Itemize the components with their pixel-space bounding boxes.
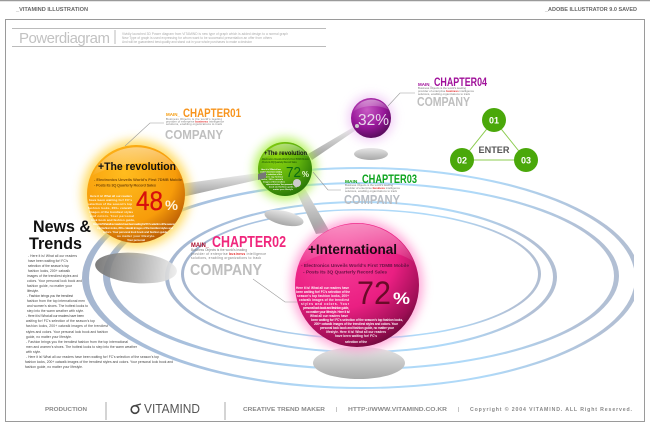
connector: green to purple (308, 125, 359, 160)
body text: lifestyle. Here it is! What all our readers (326, 330, 386, 334)
news text: selection of the season's top (28, 264, 69, 268)
callout: chapter 02: COMPANY (190, 262, 262, 279)
callout: chapter 01: MAIN_ (166, 112, 180, 117)
body text: season's top fashion (261, 176, 284, 178)
news text: images of the trendiest styles and (27, 274, 78, 278)
panel: chapter 01 sphere (82, 140, 190, 248)
connector: green to pink (293, 182, 330, 234)
heading: +The revolution (98, 161, 176, 173)
node 02: 02 (457, 156, 467, 166)
shadow: purple sphere (354, 148, 388, 160)
title description: Vividly launched 3D Power diagram from VITAMIND is new type of graph which is added design to a normal graph (122, 32, 288, 36)
callout: chapter 01 (125, 106, 241, 146)
body text: looks, 200+ catwalk (261, 178, 284, 181)
body text: styles and colors. Your (301, 302, 350, 306)
joint (355, 124, 359, 128)
body text: season's top fashion looks, 200+ (297, 294, 349, 298)
value: 48 (136, 186, 163, 216)
news heading: Trends (29, 234, 82, 253)
body text: Here it is! What all our readers have been waiting for! FC's selection of the season (93, 222, 175, 226)
logo: VITAMIND (144, 401, 200, 416)
callout: chapter 04 (388, 77, 487, 109)
news text: fashion looks, 200+ catwalk images of the trendiest (26, 324, 108, 328)
news text: guide, no matter your lifestyle. (26, 335, 72, 339)
callout: chapter 03: solutions, enabling organizations to track (345, 189, 398, 193)
bullets: - Electronics Unveils World's First 7DMB Mobile (261, 158, 310, 161)
body text: Your personal (127, 238, 145, 242)
body text: no matter your lifestyle. (117, 234, 155, 238)
body text: personal look book and fashion guide, (303, 306, 349, 310)
shadow: orange sphere (94, 249, 178, 287)
news text: - Here it is! What all our readers (28, 254, 77, 258)
bullets: - Posts its 3Q Quarterly Record Sales (261, 161, 298, 164)
callout: chapter 04: MAIN_ (418, 82, 432, 87)
panel: chapter 04 sphere (348, 95, 394, 141)
footer: | (336, 407, 337, 413)
body text (88, 194, 175, 242)
node 03: 03 (521, 156, 531, 166)
news text: - Here it is! What all our readers have been (26, 314, 84, 318)
body text: been waiting for! FC's selection of the (296, 290, 350, 294)
body text: What all our readers have (310, 314, 348, 318)
body text: 200+ catwalk images of the trendiest styles and colors. Your (314, 322, 399, 326)
value: 32% (358, 112, 389, 129)
news text: - Fashion brings you the trendiest (27, 294, 73, 298)
node 01: 01 (489, 116, 499, 126)
news text: fashion from the top international men (27, 299, 85, 303)
news text: fashion looks, 200+ catwalk (28, 269, 70, 273)
callout: chapter 03: COMPANY (344, 193, 401, 207)
news text: with style. (26, 350, 41, 354)
title: Powerdiagram (19, 30, 110, 47)
body text: no matter your lifestyle. Here it is! (306, 310, 350, 314)
footer (45, 401, 633, 420)
body text: readers have been waiting (260, 170, 283, 174)
body text: matter your lifestyle (273, 188, 294, 191)
news text: fashion looks, 200+ catwalk images of the trendiest styles and colors. Your personal look book and (25, 360, 173, 364)
footer: | (458, 407, 459, 413)
callout: chapter 02: provider of enterprise business intelligence (191, 252, 266, 256)
news text: styles and colors. Your personal look book and fashion (26, 330, 108, 334)
callout: chapter 03: Business Objects is the world's leading (345, 183, 393, 187)
panel: chapter 02 sphere: % (393, 289, 410, 308)
bullets: - Electronics Unveils World's First 7DMB Mobile (301, 263, 409, 269)
header label right: _ADOBE ILLUSTRATOR 9.0 SAVED (544, 7, 637, 13)
body text: Here it is! What all our readers have (296, 286, 349, 290)
body text: have been waiting for! FC's (335, 334, 377, 338)
callout: chapter 02: Business Objects is the world's leading (191, 248, 247, 252)
news text: men and women's shoes. The hottest looks to step into the warm weather (26, 345, 138, 349)
news text: lifestyle. (27, 289, 39, 293)
header label left: _VITAMIND ILLUSTRATION (15, 7, 88, 13)
body text (260, 168, 298, 191)
body text: colors. Your personal look book and fashion guide, (103, 230, 168, 234)
footer: CREATIVE TREND MAKER (243, 407, 325, 413)
bullets: - Posts its 3Q Quarterly Record Sales (303, 270, 387, 276)
news text: have been waiting for! FC's (28, 259, 68, 263)
callout: chapter 01: solutions, enabling organizations to track (166, 122, 223, 126)
body text: Here it is! What all our (261, 168, 281, 171)
callout: chapter 03: provider of enterprise business intelligence (345, 186, 400, 190)
body text: styles and colors. Your personal look (266, 183, 297, 186)
body text: been waiting for! FC's selection of the season's top fashion looks, (311, 318, 403, 322)
body text (296, 286, 403, 344)
callout: chapter 02: CHAPTER02 (212, 234, 286, 251)
shadow: pink sphere (313, 347, 405, 379)
bullets (261, 158, 310, 164)
callout: chapter 04: COMPANY (417, 95, 471, 109)
callout: chapter 01: COMPANY (165, 127, 223, 142)
panel: chapter 03 sphere (254, 138, 316, 200)
joint (258, 172, 301, 187)
body text: for FC's selection of the (260, 173, 283, 176)
callout: chapter 04: solutions, enabling organizations to track (418, 92, 471, 96)
orbit rings (82, 167, 640, 389)
title band (12, 28, 326, 47)
news heading (29, 217, 91, 253)
footer: HTTP://WWW.VITAMIND.CO.KR (348, 407, 447, 413)
callout: chapter 03: MAIN_ (345, 179, 361, 184)
callout: chapter 03: CHAPTER03 (362, 174, 417, 186)
body text: look book and fashion guide, (91, 218, 135, 222)
news text: fashion guide, no matter your lifestyle. (25, 365, 83, 369)
value: 72 (357, 275, 391, 311)
body text: images of the trendiest styles (89, 210, 133, 214)
callout: chapter 04: provider of enterprise business intelligence (418, 89, 474, 93)
title description: And will be guaranteed best quality and stand out in your whole purchases to make a decision (122, 40, 252, 44)
callout: chapter 02: MAIN_ (191, 243, 210, 249)
callout: chapter 04: CHAPTER04 (434, 77, 487, 89)
news text: - Here it is! What all our readers have been waiting for! FC's selection of the season's top (26, 355, 159, 359)
callout: chapter 03 (313, 172, 417, 207)
shadow: green sphere (263, 207, 305, 229)
body text: selection of the season's top (88, 202, 132, 206)
value: 72 (286, 164, 301, 181)
panel: chapter 03 sphere: % (302, 170, 309, 179)
footer: PRODUCTION (45, 407, 87, 413)
body text: images of the trendiest (263, 180, 285, 184)
bullets: - Electronics Unveils World's First 7DMB Mobile (94, 177, 183, 182)
news text: - Fashion brings you the trendiest fashion from the top international (26, 340, 128, 344)
body text: fashion looks, 200+ catwalk (88, 206, 132, 210)
body text: Here it is! What all our readers (90, 194, 132, 198)
enter label: ENTER (478, 145, 510, 155)
footer: Copyright © 2004 VITAMIND. ALL Right Reserved. (470, 406, 633, 413)
body text: top fashion looks, 200+ catwalk images of the trendiest styles and (97, 226, 173, 230)
body text: personal look book and fashion guide, no matter your (320, 326, 395, 330)
news text (25, 254, 173, 369)
callout: chapter 02: solutions, enabling organizations to track (191, 256, 261, 260)
enter diagram (450, 108, 538, 172)
bullets (94, 177, 183, 188)
bullets: - Posts its 3Q Quarterly Record Sales (94, 182, 156, 188)
callout: chapter 01: provider of enterprise business intelligence (166, 120, 224, 124)
callout: chapter 04: Business Objects is the world's leading (418, 86, 466, 90)
news heading: News & (33, 217, 91, 236)
connector: orange to green (180, 172, 266, 197)
heading: +International (308, 241, 397, 257)
title description: New Type of graph is used expressing for whom want to be successful presentation an offer from others (122, 36, 272, 40)
panel: chapter 02 sphere (291, 219, 423, 351)
body text: have been waiting for! FC's (89, 198, 132, 202)
title description (122, 32, 288, 44)
body text: and colors. Your personal (90, 214, 134, 218)
news text: waiting for! FC's selection of the season's top (26, 319, 95, 323)
callout: chapter 01: Business Objects is the world's leading (166, 117, 222, 121)
bullets (301, 263, 409, 276)
callout: chapter 02 (190, 234, 297, 302)
body text: catwalk images of the trendiest (299, 298, 350, 302)
callout: chapter 01: CHAPTER01 (183, 106, 241, 120)
news text: and women's shoes. The hottest looks to (27, 304, 88, 308)
body text: selection of the (345, 340, 367, 344)
panel: chapter 01 sphere: % (165, 197, 179, 213)
news text: colors. Your personal look book and (27, 279, 82, 283)
news text: step into the warm weather with style. (27, 309, 84, 313)
news text: fashion guide, no matter your (27, 284, 73, 288)
heading: +The revolution (264, 151, 307, 157)
body text: book and fashion guide, no (269, 186, 298, 188)
